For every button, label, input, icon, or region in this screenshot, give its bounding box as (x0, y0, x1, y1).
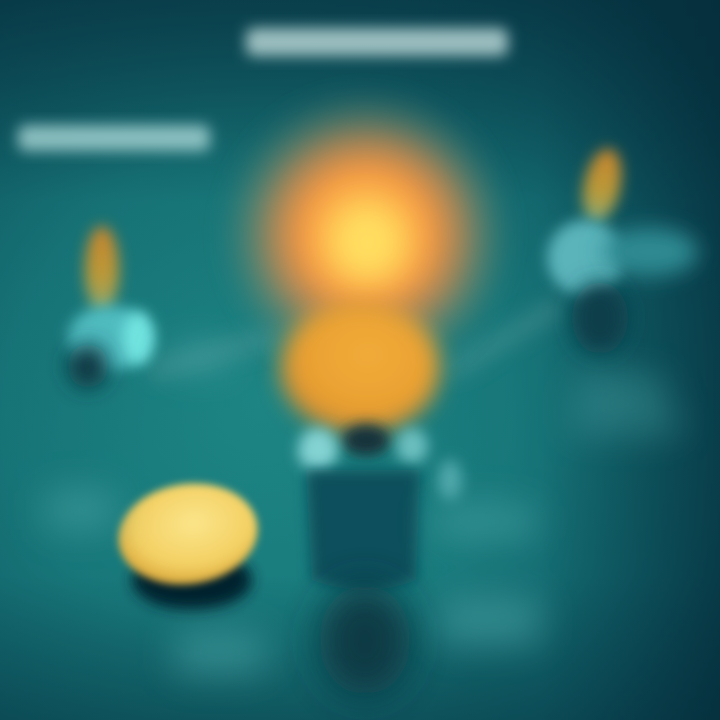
left flame (85, 226, 119, 314)
icon: coin (112, 475, 264, 610)
coin shadow (132, 550, 252, 610)
base shadow (319, 585, 411, 695)
icon: light bulb (280, 302, 462, 695)
bulb socket (342, 424, 390, 456)
glow: light burst (216, 85, 516, 385)
figure: right (547, 145, 698, 354)
right flame (576, 145, 628, 227)
bulb base (306, 470, 420, 590)
bulb shoulders (298, 428, 462, 500)
left body (68, 306, 152, 370)
title (246, 28, 508, 56)
coin face (112, 475, 264, 593)
heading: left (18, 125, 210, 151)
connector lines (150, 305, 560, 372)
right body (547, 220, 623, 296)
left shadow (68, 344, 108, 388)
figure: left (68, 226, 153, 388)
label smudges (45, 345, 680, 674)
right shadow (572, 282, 628, 354)
bulb glass (280, 302, 440, 434)
